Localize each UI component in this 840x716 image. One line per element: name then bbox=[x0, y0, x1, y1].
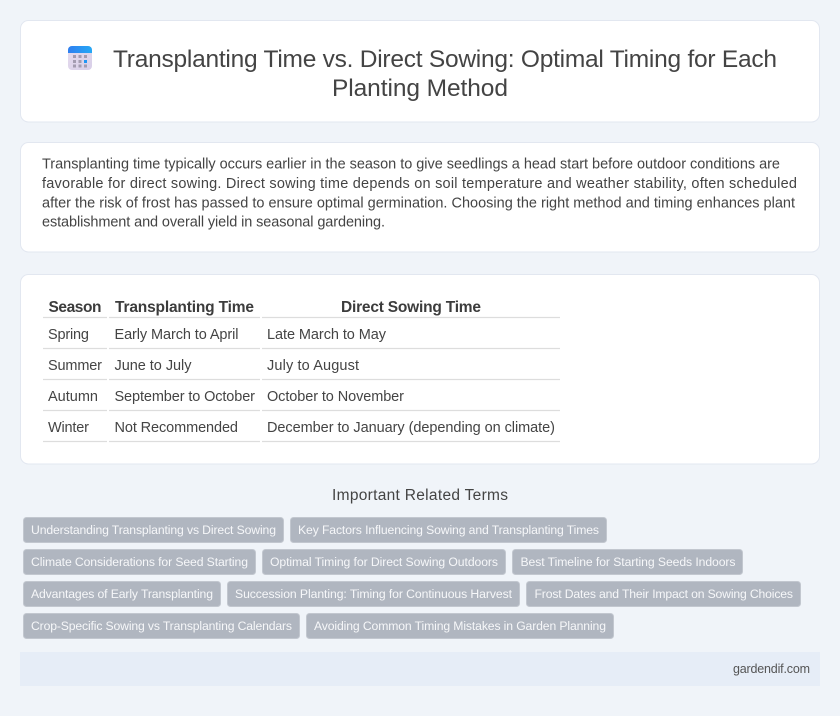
row: spring bbox=[48, 327, 387, 343]
panel: related term tags: Succession Planting: Timing for Continuous Harvest bbox=[235, 587, 513, 601]
panel: summary text: favorable for direct sowing. Direct sowing time depends on soil temperature and weather stability, often scheduled bbox=[42, 176, 797, 192]
heading: related terms: Important Related Terms bbox=[332, 487, 508, 504]
row: winter: Not Recommended bbox=[114, 420, 238, 436]
row: summer bbox=[48, 358, 359, 374]
row: autumn: September to October bbox=[114, 389, 255, 405]
table header bbox=[48, 299, 481, 316]
title: Planting Method bbox=[332, 75, 508, 102]
panel: related term tags bbox=[24, 518, 800, 638]
row: autumn: Autumn bbox=[48, 389, 98, 405]
row: winter bbox=[48, 420, 555, 436]
panel: related term tags: Key Factors Influencing Sowing and Transplanting Times bbox=[298, 523, 599, 537]
table header: Season bbox=[48, 299, 102, 316]
title: Transplanting Time vs. Direct Sowing: Optimal Timing for Each bbox=[113, 46, 777, 73]
panel: header bbox=[20, 20, 820, 122]
row: spring: Spring bbox=[48, 327, 89, 343]
panel: related term tags: Avoiding Common Timing Mistakes in Garden Planning bbox=[314, 619, 606, 633]
panel: summary text: Transplanting time typically occurs earlier in the season to give seedlings a head start before outdoor conditions are bbox=[42, 156, 780, 172]
table header: Direct Sowing Time bbox=[341, 299, 481, 316]
row: summer: Summer bbox=[48, 358, 102, 374]
row: spring: Early March to April bbox=[114, 327, 238, 343]
row: winter: December to January (depending on climate) bbox=[267, 420, 555, 436]
panel: related term tags: Climate Considerations for Seed Starting bbox=[31, 555, 248, 569]
table header: Transplanting Time bbox=[115, 299, 254, 316]
row: summer: June to July bbox=[114, 358, 192, 374]
row: winter: Winter bbox=[48, 420, 89, 436]
panel: related term tags: Advantages of Early Transplanting bbox=[31, 587, 213, 601]
title bbox=[113, 46, 777, 102]
row: summer: July to August bbox=[267, 358, 359, 374]
panel: summary text: establishment and overall yield in seasonal gardening. bbox=[42, 214, 385, 230]
panel: summary text bbox=[20, 142, 820, 252]
row: spring: Late March to May bbox=[267, 327, 387, 343]
panel: summary text: after the risk of frost has passed to ensure optimal germination. Choosing the right method and timing enhances plant bbox=[42, 195, 795, 211]
panel: related term tags: Crop-Specific Sowing vs Transplanting Calendars bbox=[31, 619, 292, 633]
icon: calendar bbox=[68, 46, 92, 70]
footer: gardendif.com bbox=[733, 662, 810, 676]
row: autumn: October to November bbox=[267, 389, 404, 405]
panel: related term tags: Optimal Timing for Direct Sowing Outdoors bbox=[270, 555, 498, 569]
panel: related term tags: Best Timeline for Starting Seeds Indoors bbox=[520, 555, 736, 569]
panel: related term tags: Understanding Transplanting vs Direct Sowing bbox=[31, 523, 276, 537]
footer bbox=[20, 652, 820, 686]
panel: related term tags: Frost Dates and Their Impact on Sowing Choices bbox=[534, 587, 793, 601]
panel: comparison table bbox=[20, 274, 820, 464]
row: autumn bbox=[48, 389, 404, 405]
